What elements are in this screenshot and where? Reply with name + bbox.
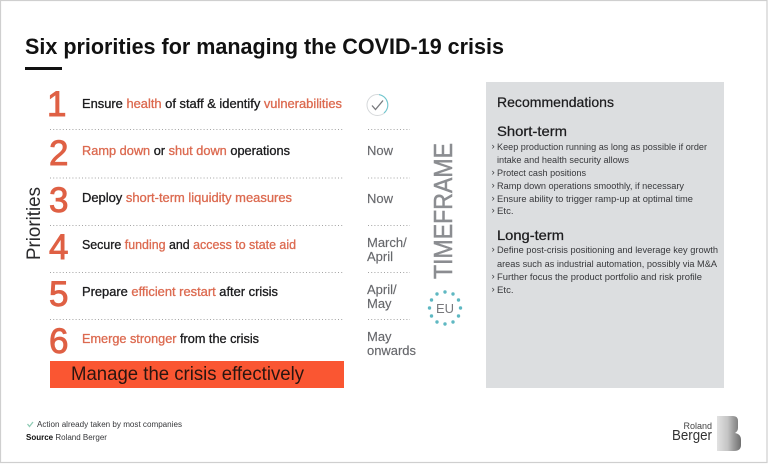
long-term block bbox=[492, 227, 718, 296]
long-term block: Etc. bbox=[497, 285, 514, 296]
axis label: priorities: Priorities bbox=[24, 187, 45, 260]
short-term block: intake and health security allows bbox=[497, 155, 629, 166]
short-term block: Short-term bbox=[497, 123, 567, 139]
banner: manage the crisis effectively bbox=[50, 361, 344, 388]
priority 3: Deploy short-term liquidity measures bbox=[82, 191, 292, 205]
short-term block: Etc. bbox=[497, 206, 514, 217]
timeframe column: Now bbox=[367, 191, 394, 206]
priority 6: 6 bbox=[49, 322, 68, 361]
title bbox=[25, 34, 504, 70]
banner: manage the crisis effectively: Manage the crisis effectively bbox=[71, 364, 304, 385]
long-term block: areas such as industrial automation, possibly via M&A bbox=[497, 259, 718, 270]
source: Source Roland Berger bbox=[26, 433, 107, 442]
long-term block: Further focus the product portfolio and risk profile bbox=[497, 272, 702, 283]
priority 4: 4 bbox=[49, 228, 68, 267]
short-term block: Ramp down operations smoothly, if necessary bbox=[497, 181, 684, 192]
short-term block: › bbox=[492, 167, 495, 178]
timeframe column: March/ bbox=[367, 235, 407, 250]
timeframe column: May bbox=[367, 296, 392, 311]
timeframe column: onwards bbox=[367, 343, 416, 358]
icon: EU stars: EU bbox=[436, 301, 454, 316]
priority 2: Ramp down or shut down operations bbox=[82, 144, 290, 158]
priority 4: Secure funding and access to state aid bbox=[82, 238, 296, 252]
priority 5 bbox=[49, 275, 278, 314]
long-term block: Long-term bbox=[497, 227, 564, 243]
legend note: Action already taken by most companies bbox=[37, 420, 182, 429]
priority 1 bbox=[47, 85, 342, 124]
heading: recommendations: Recommendations bbox=[497, 94, 614, 110]
title: Six priorities for managing the COVID-19 crisis bbox=[25, 34, 504, 59]
priority 6 bbox=[49, 322, 259, 361]
axis label: timeframe: TIMEFRAME bbox=[428, 143, 458, 279]
short-term block: Ensure ability to trigger ramp-up at optimal time bbox=[497, 194, 693, 205]
logo: Roland Berger: Roland bbox=[683, 421, 712, 431]
long-term block: › bbox=[492, 271, 495, 282]
timeframe column: Now bbox=[367, 143, 394, 158]
short-term block: › bbox=[492, 141, 495, 152]
logo: Roland Berger: Berger bbox=[672, 427, 712, 444]
priority 2: 2 bbox=[49, 134, 68, 173]
priority 3 bbox=[49, 181, 292, 220]
long-term block: › bbox=[492, 244, 495, 255]
priority 5: 5 bbox=[49, 275, 68, 314]
priority 1: 1 bbox=[47, 85, 66, 124]
logo: Roland Berger bbox=[672, 416, 741, 451]
priority 4 bbox=[49, 228, 296, 267]
panel: priorities list bbox=[47, 85, 343, 361]
panel: recommendations bbox=[486, 82, 724, 388]
long-term block: Define post-crisis positioning and leverage key growth bbox=[497, 245, 718, 256]
long-term block: › bbox=[492, 284, 495, 295]
short-term block: › bbox=[492, 180, 495, 191]
icon: check mark in circle bbox=[367, 94, 388, 116]
short-term block bbox=[492, 123, 708, 217]
timeframe column: April/ bbox=[367, 282, 397, 297]
icon: EU stars bbox=[428, 290, 462, 326]
priority 6: Emerge stronger from the crisis bbox=[82, 332, 259, 346]
priority 3: 3 bbox=[49, 181, 68, 220]
short-term block: › bbox=[492, 193, 495, 204]
priority 2 bbox=[49, 134, 290, 173]
timeframe column: April bbox=[367, 249, 393, 264]
short-term block: Keep production running as long as possible if order bbox=[497, 142, 708, 153]
priority 5: Prepare efficient restart after crisis bbox=[82, 285, 278, 299]
priority 1: Ensure health of staff & identify vulnerabilities bbox=[82, 97, 342, 111]
timeframe column: May bbox=[367, 329, 392, 344]
timeframe column bbox=[367, 94, 416, 358]
short-term block: Protect cash positions bbox=[497, 168, 586, 179]
short-term block: › bbox=[492, 205, 495, 216]
